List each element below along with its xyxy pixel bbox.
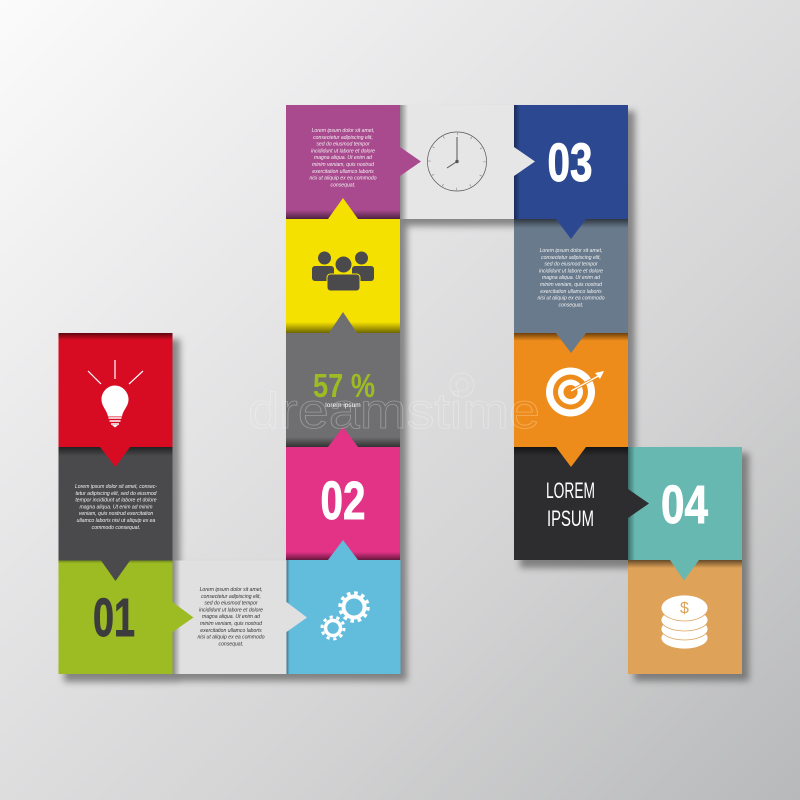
heading: lorem ipsum: LOREM: [546, 478, 595, 503]
text block: magenta tile: exercitation ullamco laboris: [312, 169, 374, 175]
icon: gears: [322, 593, 368, 639]
text block: light tile: nisi ut aliquip ex ea commodo: [197, 634, 265, 640]
arrow: light gray right: [514, 147, 535, 176]
icon: clock: [428, 132, 486, 191]
text block: magenta tile: sed do eiusmod tempor: [316, 142, 370, 148]
text block: light tile: Lorem ipsum dolor sit amet,: [200, 587, 262, 593]
arrow: light gray right: [286, 602, 307, 632]
text block: light tile: consectetur adipiscing elit,: [201, 594, 261, 600]
panel: teal 04 tile: [628, 447, 742, 580]
arrow: red down: [100, 447, 130, 467]
panel: gray 57 percent tile: [286, 333, 400, 447]
arrow: pink up: [328, 427, 358, 447]
text block: light tile: incididunt ut labore et dolore: [199, 608, 263, 614]
text block: slate tile: consequat.: [559, 302, 583, 308]
panel: navy 03 tile: [514, 105, 628, 219]
number 02: 02: [320, 471, 366, 531]
panel: yellow team tile: [286, 219, 400, 333]
panel: dark text tile: [58, 447, 172, 560]
arrow: black right: [628, 489, 649, 518]
panel: clock tile: [400, 105, 514, 219]
text block: light tile: sed do eiusmod tempor: [204, 600, 258, 606]
text block: magenta tile: Lorem ipsum dolor sit amet,: [312, 128, 374, 134]
icon: target: [546, 368, 604, 416]
arrow: orange down: [556, 447, 586, 467]
number 04: 04: [661, 475, 708, 535]
text block: dark tile: magna aliqua. Ut enim ad minim: [79, 504, 153, 510]
text block: magenta tile: consequat.: [331, 182, 355, 188]
text block: light tile: minim veniam, quis nostrud: [200, 621, 262, 627]
text block: dark tile: veniam, quis nostrud exercitation: [79, 511, 153, 517]
arrow: gray up: [329, 312, 357, 333]
text block: slate tile: sed do eiusmod tempor: [544, 262, 598, 268]
panel: column 3: [514, 105, 628, 560]
panel: blue gears tile: [286, 560, 400, 674]
arrow: magenta right: [400, 147, 421, 176]
text block: slate tile: nisi ut aliquip ex ea commodo: [537, 296, 605, 302]
caption: lorem ipsum: lorem ipsum: [325, 402, 361, 409]
arrow: slate down: [556, 333, 586, 353]
text block: light tile: consequat.: [219, 642, 243, 648]
text block: light tile: exercitation ullamco laboris: [200, 628, 262, 634]
icon: coins: $: [680, 600, 689, 617]
text block: slate tile: magna aliqua. Ut enim ad: [542, 275, 600, 281]
panel: pink 02 tile: [286, 447, 400, 560]
arrow: teal down: [670, 560, 699, 580]
panel: tan coins tile: [628, 560, 742, 674]
text block: slate tile: minim veniam, quis nostrud: [540, 282, 602, 288]
text block: magenta tile: magna aliqua. Ut enim ad: [314, 155, 372, 161]
text block: dark tile: Lorem ipsum dolor sit amet, consec-: [75, 484, 157, 490]
heading: lorem ipsum: IPSUM: [547, 506, 594, 531]
text block: magenta tile: consectetur adipiscing elit,: [313, 135, 373, 141]
text block: magenta tile: nisi ut aliquip ex ea commodo: [309, 176, 377, 182]
text block: dark tile: tempor incididunt ut labore et dolore: [75, 498, 157, 504]
text block: magenta tile: incididunt ut labore et dolore: [311, 148, 375, 154]
watermark: dreamstime: [248, 383, 540, 439]
icon: light bulb: [88, 360, 143, 428]
panel: column 4: [628, 447, 742, 674]
icon: people: [312, 252, 374, 291]
arrow: yellow up: [328, 198, 358, 219]
text block: slate tile: consectetur adipiscing elit,: [541, 255, 601, 261]
panel: slate text tile: [514, 219, 628, 333]
arrow: navy down: [556, 219, 586, 239]
text block: slate tile: incididunt ut labore et dolore: [539, 268, 603, 274]
panel: column 2: [286, 105, 400, 674]
arrow: green right: [172, 602, 194, 632]
text block: magenta tile: minim veniam, quis nostrud: [312, 162, 374, 168]
stat: 57 percent: 57 %: [313, 367, 375, 404]
panel: magenta text tile: [286, 105, 400, 219]
panel: column 1: [58, 333, 286, 674]
panel: red bulb tile: [58, 333, 172, 447]
arrow: dark gray down: [101, 560, 130, 581]
text block: light tile: magna aliqua. Ut enim ad: [202, 614, 260, 620]
text block: dark tile: tetur adipiscing elit, sed do eiusmod: [76, 491, 157, 497]
number 03: 03: [548, 133, 592, 193]
panel: black lorem ipsum tile: [514, 447, 628, 560]
arrow: blue up: [328, 540, 358, 560]
panel: light text tile: [172, 560, 286, 674]
text block: dark tile: commodo consequat.: [92, 525, 140, 531]
drop shadows: [64, 111, 749, 682]
text block: dark tile: ullamco laboris nisi ut aliquip ex ea: [77, 518, 156, 524]
text block: slate tile: Lorem ipsum dolor sit amet,: [540, 248, 602, 254]
panel: green 01 tile: [58, 560, 172, 674]
number 01: 01: [93, 588, 135, 648]
text block: slate tile: exercitation ullamco laboris: [540, 289, 602, 295]
panel: orange target tile: [514, 333, 628, 447]
